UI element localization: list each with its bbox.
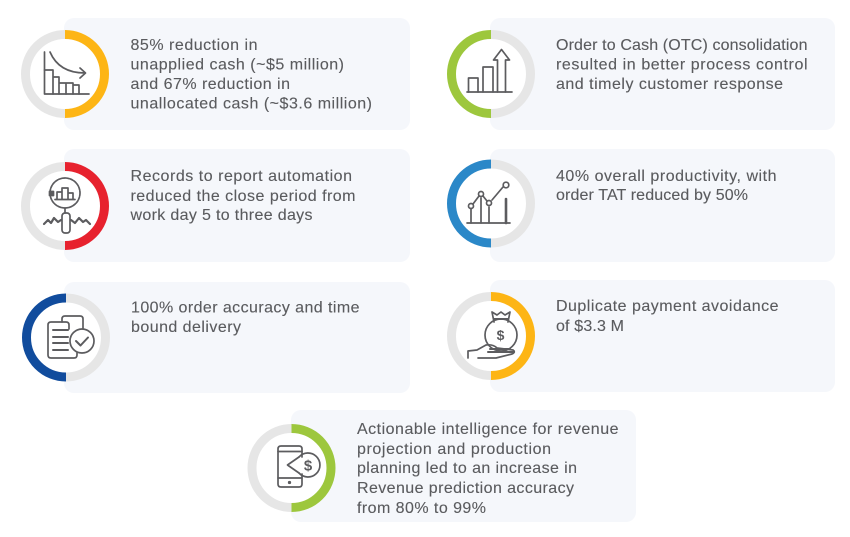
icon: hand holding money bag: $ xyxy=(497,327,505,343)
progress ring: blue xyxy=(452,164,530,243)
text: actionable intelligence: Actionable intelligence for revenue xyxy=(357,421,619,438)
progress ring: amber xyxy=(452,296,530,376)
text: records to report: work day 5 to three days xyxy=(130,207,312,224)
icon: hand holding money bag xyxy=(468,312,517,358)
progress ring: green xyxy=(252,428,331,508)
card background xyxy=(490,280,835,392)
icon: documents with check mark xyxy=(48,316,94,358)
icon: declining bar chart xyxy=(44,52,89,94)
text: order to cash: and timely customer response xyxy=(556,76,783,93)
text: productivity: 40% overall productivity, with xyxy=(556,168,776,185)
text: duplicate payment: of $3.3 M xyxy=(556,318,624,335)
card background xyxy=(64,282,410,393)
icon: line and bar chart xyxy=(467,182,510,223)
text: order to cash: Order to Cash (OTC) consolidation xyxy=(556,37,808,54)
text: productivity: order TAT reduced by 50% xyxy=(556,187,748,204)
text: productivity xyxy=(556,168,776,204)
text: actionable intelligence: Revenue prediction accuracy xyxy=(357,480,574,497)
progress ring: navy xyxy=(27,298,106,377)
text: records to report: reduced the close period from xyxy=(130,188,356,205)
card background xyxy=(64,149,410,262)
text: actionable intelligence: projection and production xyxy=(357,441,551,458)
panel: records to report automation xyxy=(26,149,410,262)
text: unapplied cash: 85% reduction in xyxy=(130,37,258,54)
panel: duplicate payment avoidance xyxy=(452,280,835,392)
text: actionable intelligence xyxy=(357,421,619,517)
icon: phone with dollar bubble: $ xyxy=(304,458,313,474)
text: unapplied cash: unapplied cash (~$5 million) xyxy=(130,56,344,74)
panel: order to cash consolidation xyxy=(452,18,835,130)
panel: actionable intelligence xyxy=(252,410,636,522)
icon: phone with dollar bubble xyxy=(278,446,320,487)
progress ring: amber xyxy=(26,34,105,114)
text: unapplied cash: and 67% reduction in xyxy=(130,76,290,93)
text: actionable intelligence: planning led to an increase in xyxy=(357,460,577,477)
panel: overall productivity xyxy=(452,149,835,262)
text: actionable intelligence: from 80% to 99% xyxy=(357,500,486,517)
icon: rising bars with arrow xyxy=(467,50,512,92)
card background xyxy=(490,18,835,130)
text: order to cash xyxy=(556,37,808,93)
card background xyxy=(490,149,835,262)
text: records to report xyxy=(130,168,356,224)
text: order accuracy: bound delivery xyxy=(131,319,241,336)
text: order accuracy: 100% order accuracy and time xyxy=(131,300,360,317)
progress ring: red xyxy=(26,166,105,246)
text: unapplied cash: unallocated cash (~$3.6 million) xyxy=(130,96,372,112)
icon: magnifier over chart xyxy=(44,178,90,233)
progress ring: green xyxy=(452,34,530,114)
text: order to cash: resulted in better process control xyxy=(556,56,808,74)
text: records to report: Records to report automation xyxy=(130,168,352,185)
text: duplicate payment xyxy=(556,298,779,335)
panel: unapplied cash reduction xyxy=(26,18,410,130)
panel: order accuracy xyxy=(27,282,410,393)
text: duplicate payment: Duplicate payment avoidance xyxy=(556,298,779,315)
text: unapplied cash xyxy=(130,37,372,112)
text: order accuracy xyxy=(131,300,360,336)
card background xyxy=(64,18,410,130)
card background xyxy=(291,410,636,522)
